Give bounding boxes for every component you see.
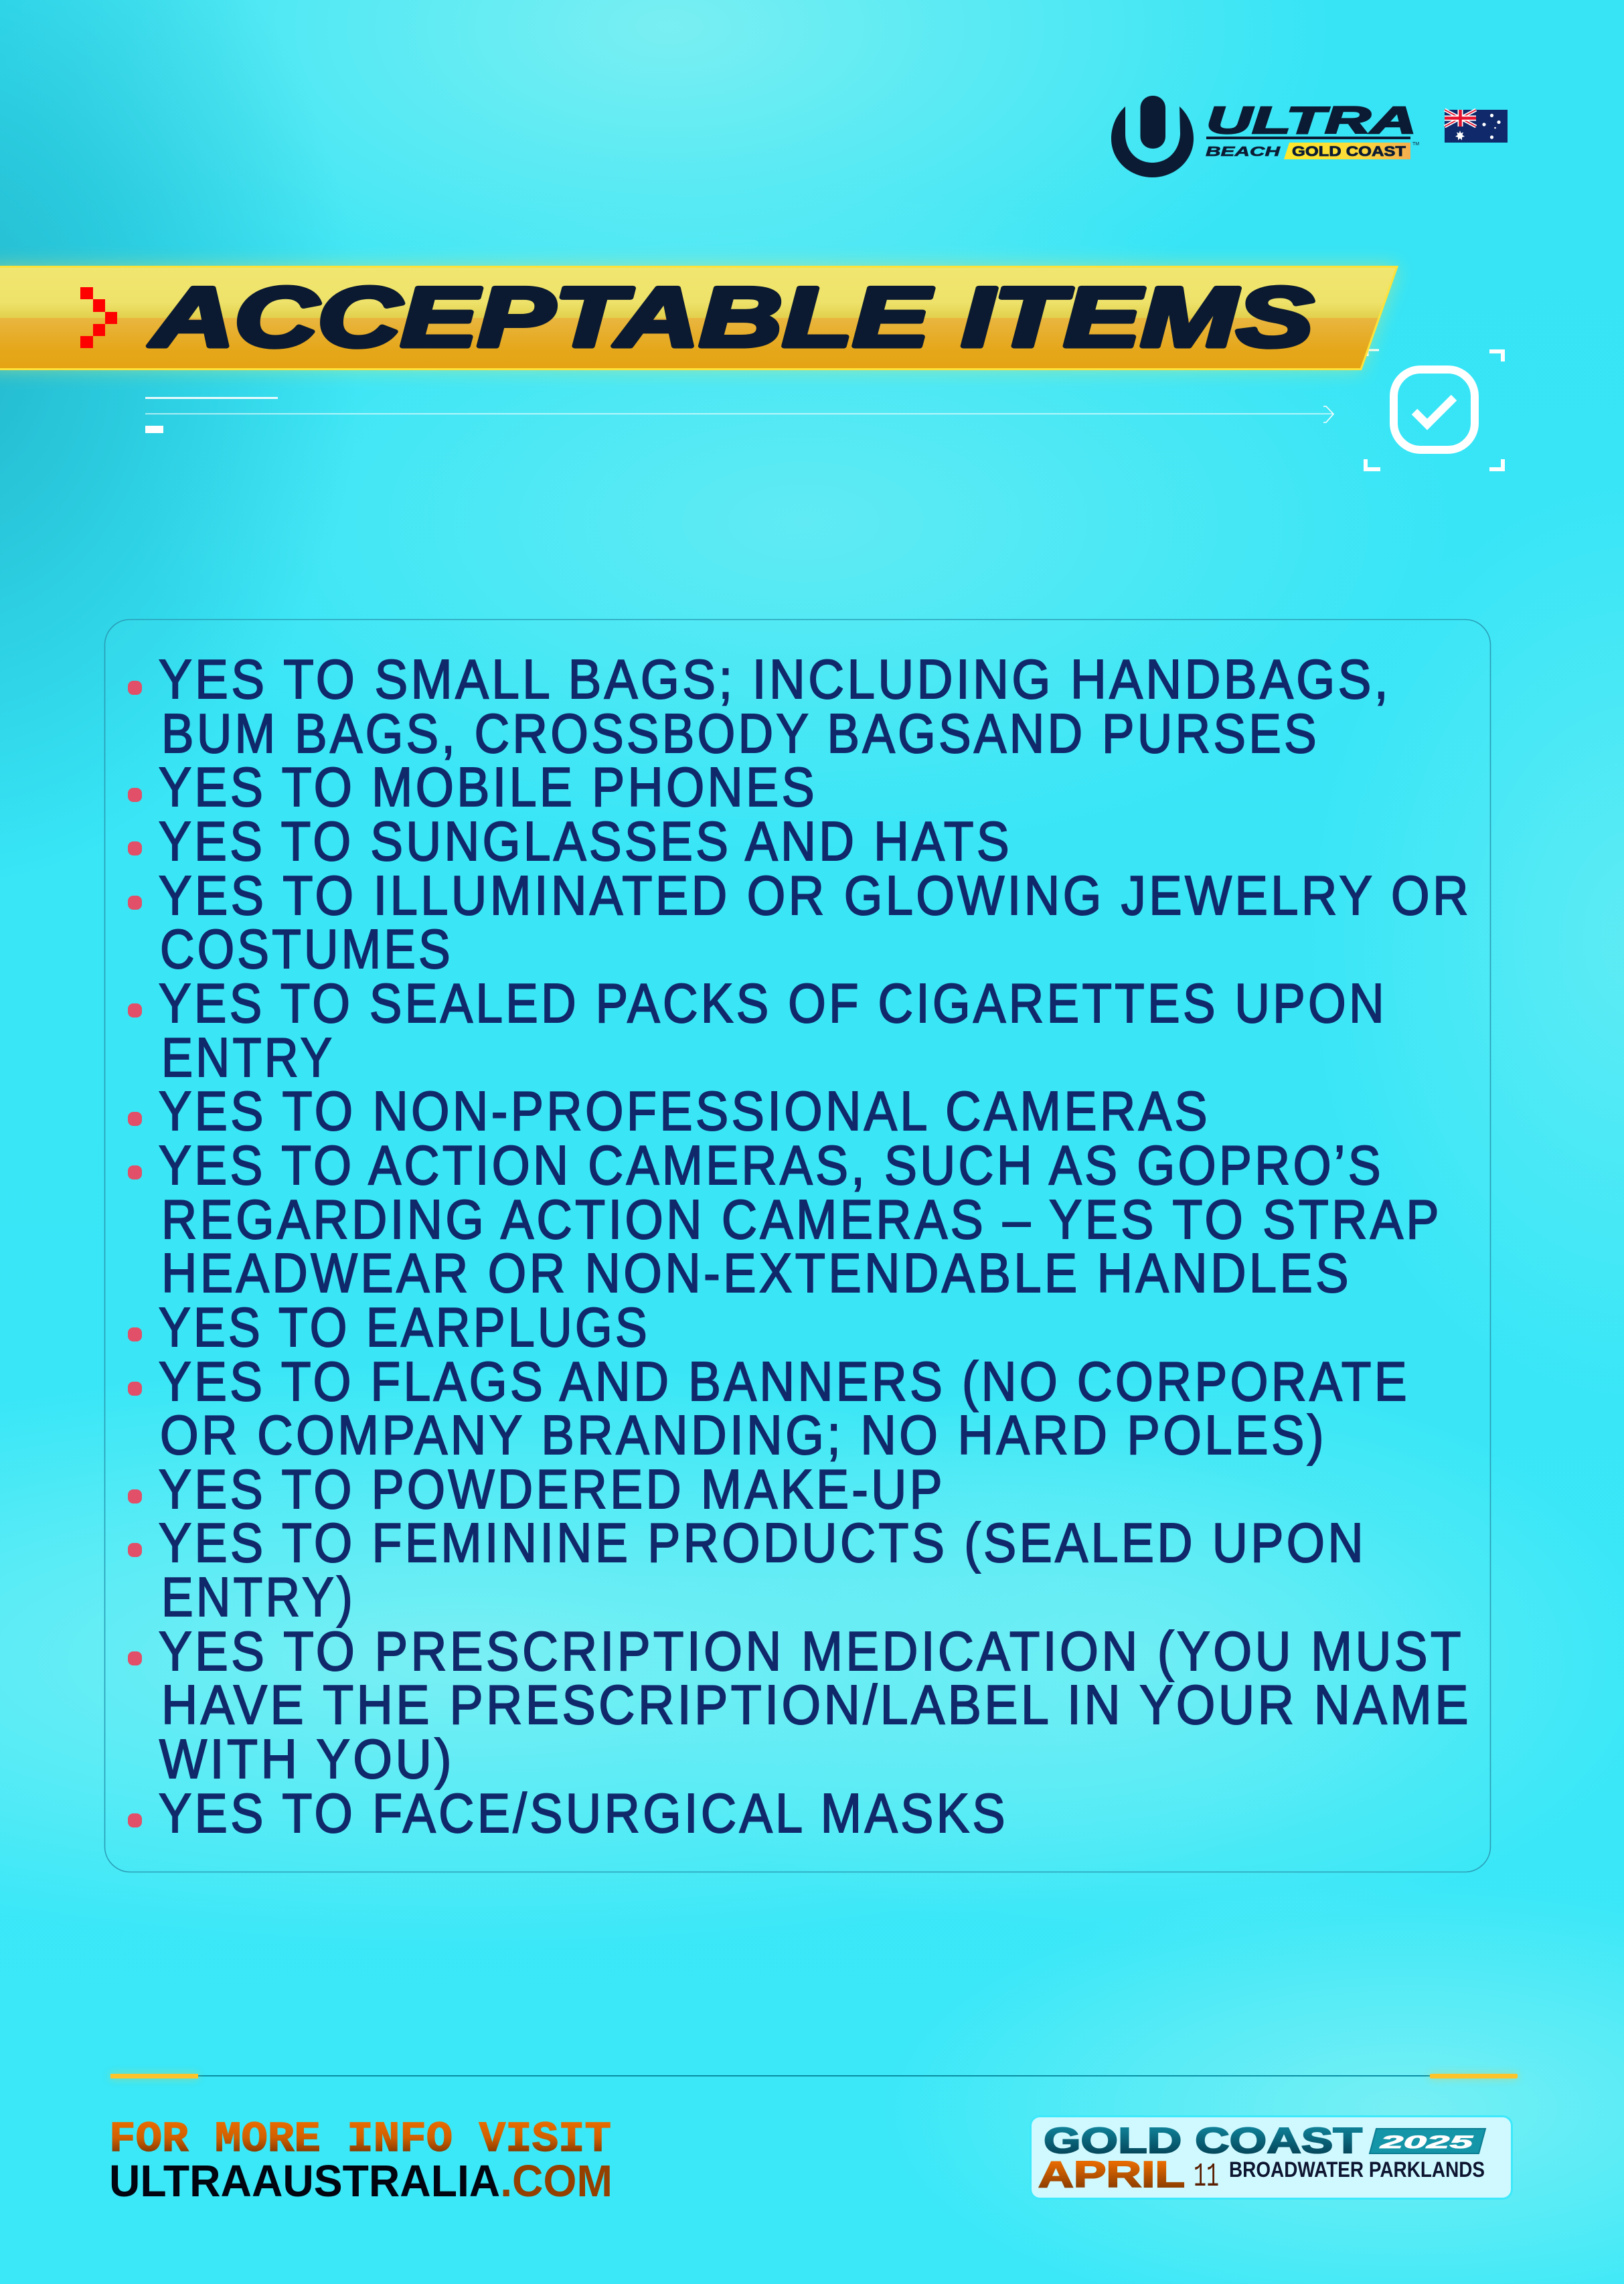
banner shape <box>0 266 1397 370</box>
website: ULTRAAUSTRALIA.COM <box>109 2156 613 2206</box>
icon: red pixel chevron <box>80 287 117 348</box>
item: face masks: YES TO FACE/SURGICAL MASKS <box>159 1782 1008 1844</box>
item: flags and banners: OR COMPANY BRANDING; NO HARD POLES) <box>160 1404 1327 1466</box>
item: feminine products: YES TO FEMININE PRODUCTS (SEALED UPON <box>159 1512 1366 1574</box>
tag: Gold Coast: GOLD COAST <box>1292 144 1406 159</box>
event badge: Gold Coast 2025 <box>1031 2117 1512 2198</box>
item: glowing jewelry <box>128 864 1471 980</box>
footer: more info <box>109 2116 613 2206</box>
item: prescription medication <box>128 1620 1471 1790</box>
year tag: 2025 <box>1379 2132 1474 2152</box>
panel: acceptable items list <box>104 620 1490 1872</box>
item: small bags: BUM BAGS, CROSSBODY BAGSAND PURSES <box>161 702 1319 764</box>
item: flags and banners <box>128 1350 1410 1466</box>
item: action cameras: HEADWEAR OR NON-EXTENDABLE HANDLES <box>161 1242 1352 1304</box>
decorative bracket behind banner <box>1368 350 1379 356</box>
item: cigarettes: ENTRY <box>161 1026 335 1088</box>
Gold Coast: GOLD COAST <box>1044 2121 1362 2161</box>
item: action cameras: YES TO ACTION CAMERAS, SUCH AS GOPRO’S <box>159 1134 1384 1196</box>
item: powdered make-up: YES TO POWDERED MAKE-UP <box>159 1458 945 1520</box>
item: non-professional cameras: YES TO NON-PROFESSIONAL CAMERAS <box>159 1080 1210 1142</box>
item: cigarettes: YES TO SEALED PACKS OF CIGARETTES UPON <box>159 972 1387 1034</box>
April: APRIL <box>1038 2153 1185 2195</box>
logo rule <box>1206 137 1410 139</box>
arrow head <box>1323 406 1333 422</box>
banner: Acceptable Items title <box>0 266 1398 370</box>
date: 11 <box>1194 2158 1219 2196</box>
tag: Gold Coast <box>1284 143 1410 159</box>
item: prescription medication: HAVE THE PRESCRIPTION/LABEL IN YOUR NAME <box>161 1674 1471 1736</box>
item: glowing jewelry: COSTUMES <box>160 918 453 980</box>
item: action cameras <box>128 1134 1442 1304</box>
footer rule with gold accents <box>110 2074 1518 2078</box>
item: glowing jewelry: YES TO ILLUMINATED OR GLOWING JEWELRY OR <box>159 864 1471 926</box>
icon: Australian flag <box>1445 110 1508 143</box>
item: feminine products <box>128 1512 1366 1628</box>
icon: check box with corner brackets <box>1366 351 1503 469</box>
item: earplugs: YES TO EARPLUGS <box>159 1296 650 1358</box>
item: prescription medication: YES TO PRESCRIPTION MEDICATION (YOU MUST <box>159 1620 1464 1682</box>
year tag <box>1370 2129 1485 2153</box>
item: prescription medication: WITH YOU) <box>159 1728 455 1790</box>
icon: Ultra U mark <box>1111 96 1194 177</box>
item: flags and banners: YES TO FLAGS AND BANNERS (NO CORPORATE <box>159 1350 1410 1412</box>
wordmark: ULTRA: ULTRA <box>1206 99 1416 142</box>
item: action cameras: REGARDING ACTION CAMERAS – YES TO STRAP <box>161 1188 1442 1250</box>
item: cigarettes <box>128 972 1387 1088</box>
venue: BROADWATER PARKLANDS <box>1229 2157 1485 2182</box>
item: sunglasses and hats: YES TO SUNGLASSES AND HATS <box>159 810 1012 872</box>
item: mobile phones: YES TO MOBILE PHONES <box>159 756 817 818</box>
item: feminine products: ENTRY) <box>161 1566 355 1628</box>
decoration: lines and arrow <box>145 397 1333 433</box>
title: ACCEPTABLE ITEMS <box>149 270 1313 364</box>
item: small bags: YES TO SMALL BAGS; INCLUDING HANDBAGS, <box>159 648 1391 710</box>
wordmark: BEACH: BEACH <box>1206 145 1281 159</box>
logo: Ultra Beach Gold Coast <box>1111 96 1419 177</box>
heading: for more info visit: FOR MORE INFO VISIT <box>109 2116 611 2164</box>
trademark: TM <box>1412 142 1419 147</box>
item: small bags <box>128 648 1391 764</box>
